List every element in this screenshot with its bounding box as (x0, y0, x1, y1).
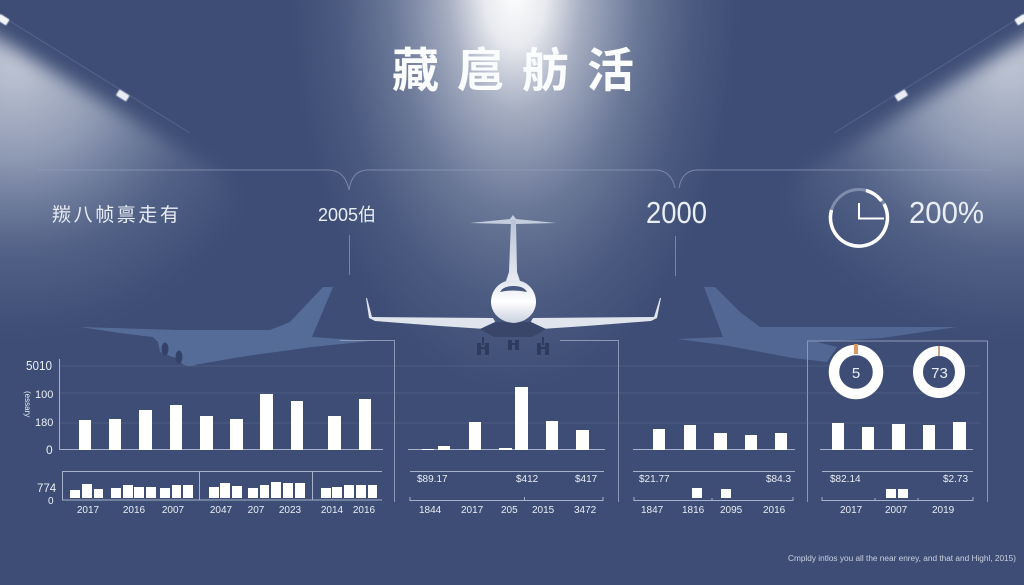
chart 1 axes (60, 359, 383, 450)
mini chart labels: 207 (248, 505, 265, 516)
chart 4 labels (830, 474, 968, 516)
chart 2 labels: $89.17 (417, 474, 448, 485)
icon: clock gauge (830, 190, 888, 246)
bar chart 3 (653, 425, 787, 498)
donut gauge: 73: 73 (931, 365, 948, 382)
mini chart labels: 0 (48, 496, 54, 507)
mini chart labels: 774 (37, 483, 57, 495)
spotlight rail: right (834, 14, 1024, 133)
chart 3 labels: $84.3 (766, 474, 791, 485)
chart 2 labels: 3472 (574, 505, 597, 516)
chart 1 axis labels: (essary (23, 391, 32, 417)
footnote: Cmpldy intlos you all the near enrey, and that and Highl, 2015) (788, 554, 1016, 563)
chart 2 labels: 2015 (532, 505, 555, 516)
header frame (38, 170, 993, 276)
fuselage nose (491, 280, 536, 323)
panel: chart 3 (633, 425, 795, 516)
mini chart labels: 2017 (77, 505, 100, 516)
plane silhouette: right (677, 287, 957, 362)
chart 2 labels: $417 (575, 474, 598, 485)
chart 4 labels: $82.14 (830, 474, 861, 485)
panel: chart 4 (820, 344, 973, 516)
chart 2 labels: 2017 (461, 505, 484, 516)
chart 4 labels: 2019 (932, 505, 955, 516)
chart 1 axis labels: 180 (35, 417, 53, 429)
mini chart labels (37, 483, 376, 516)
chart 4 labels: 2007 (885, 505, 908, 516)
mini chart labels: 2016 (123, 505, 146, 516)
spotlight rail: left (0, 14, 190, 133)
panel dividers (340, 340, 988, 502)
mini chart labels: 2007 (162, 505, 185, 516)
bar chart 1 (79, 394, 371, 450)
chart 2 labels (417, 474, 598, 516)
stat: 200%: 200% (909, 195, 984, 230)
wings (366, 298, 500, 330)
chart 1 axis labels: 5010 (26, 359, 52, 373)
chart 2 brackets (410, 472, 604, 500)
chart 3 brackets (633, 472, 795, 500)
windshield (500, 286, 527, 292)
horizontal stabilizer (470, 215, 556, 224)
mini chart labels: 2014 (321, 505, 344, 516)
chart 3 labels: 1816 (682, 505, 705, 516)
belly and engines (480, 322, 546, 337)
chart 2 labels: 205 (501, 505, 518, 516)
chart 4 labels: $2.73 (943, 474, 968, 485)
panel: chart 2 (408, 387, 605, 516)
stat: 2000: 2000 (646, 195, 707, 230)
chart 3 labels: $21.77 (639, 474, 670, 485)
central airplane (366, 215, 661, 355)
chart 3 labels: 2016 (763, 505, 786, 516)
chart 2 labels: 1844 (419, 505, 442, 516)
chart 1 axis labels: 100 (35, 389, 53, 401)
mini chart labels: 2023 (279, 505, 302, 516)
mini bar chart (70, 482, 377, 498)
landing gear (477, 337, 549, 355)
chart 4 labels: 2017 (840, 505, 863, 516)
plane silhouette: left (80, 287, 370, 366)
panel: chart 1 (23, 359, 383, 516)
chart 4 brackets (822, 472, 973, 500)
chart 3 labels: 1847 (641, 505, 664, 516)
stat label: left: 羰八帧禀走有 (52, 204, 182, 226)
bar chart 2 (422, 387, 589, 450)
mini chart frame (62, 471, 382, 500)
chart 3 labels (639, 474, 791, 516)
chart 2 labels: $412 (516, 474, 539, 485)
bar chart 4 (832, 422, 966, 498)
mini chart labels: 2047 (210, 505, 233, 516)
stat: 2005: 2005伯 (318, 205, 376, 225)
title: 藏扈舫活 (392, 44, 652, 97)
chart 3 labels: 2095 (720, 505, 743, 516)
tail fin (506, 220, 520, 281)
mini chart labels: 2016 (353, 505, 376, 516)
chart 1 axis labels: 0 (46, 443, 53, 457)
donut gauge: 5: 5 (852, 365, 860, 382)
donut gauge: 5 (834, 344, 878, 394)
donut gauge: 73 (918, 346, 960, 393)
chart 1 axis labels (23, 359, 53, 457)
